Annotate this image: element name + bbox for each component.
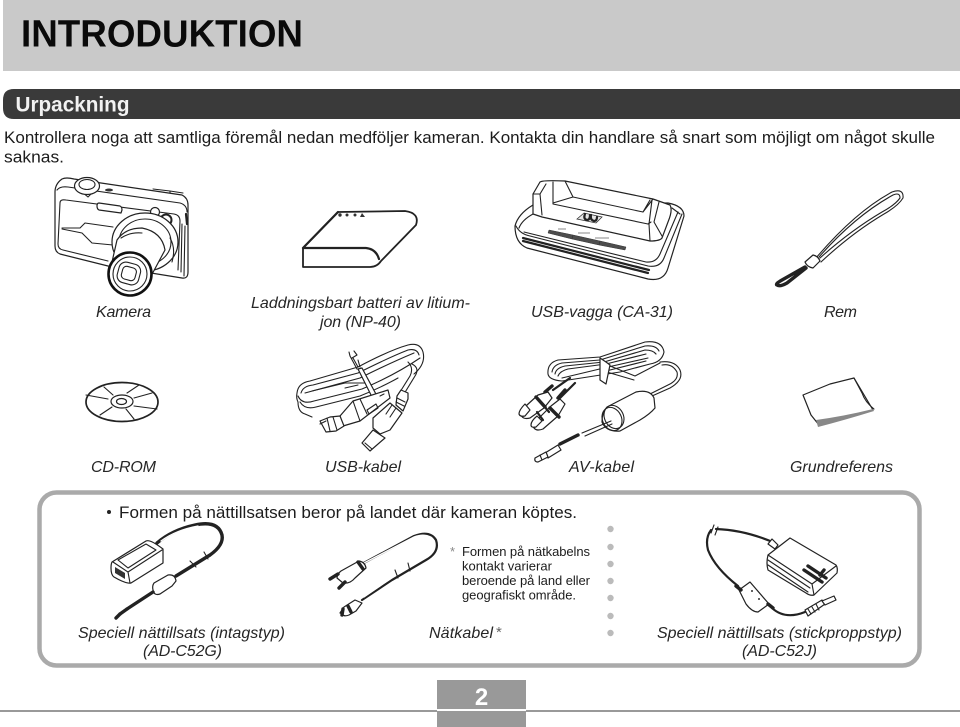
caption: camera: Kamera [96, 304, 151, 321]
caption: plug-type adapter: (AD-C52J) [742, 643, 817, 660]
caption: power cord: Nätkabel [429, 625, 493, 642]
intro text [4, 129, 935, 166]
icon: reference booklet [803, 378, 874, 427]
caption: intake-type adapter [78, 625, 285, 660]
icon: battery [303, 211, 417, 267]
footnote: kontakt varierar [462, 558, 553, 574]
icon: intake-type adapter [111, 524, 222, 618]
bullet note: Formen på nättillsatsen beror på landet där kameran köptes. [119, 503, 577, 522]
page number: 2 [475, 684, 488, 711]
section heading bar [3, 89, 960, 119]
footnote [450, 544, 591, 602]
header band [3, 0, 960, 71]
title: INTRODUKTION [21, 14, 303, 56]
caption: strap: Rem [824, 304, 857, 321]
intro text: Kontrollera noga att samtliga föremål nedan medföljer kameran. Kontakta din handlare så snart som möjligt om något skulle [4, 129, 935, 147]
icon: CD-ROM [86, 382, 158, 422]
icon: AV cable [519, 342, 681, 462]
caption: intake-type adapter: Speciell nättillsats (intagstyp) [78, 625, 285, 642]
footnote: Formen på nätkabelns [462, 544, 590, 559]
caption: CD-ROM: CD-ROM [91, 459, 157, 476]
caption: USB cradle: USB-vagga (CA-31) [531, 304, 673, 321]
caption: USB cable: USB-kabel [325, 459, 401, 476]
caption: power cord: * [496, 624, 502, 641]
footnote: geografiskt område. [462, 588, 576, 602]
caption: AV cable: AV-kabel [568, 459, 634, 476]
icon: power cord [330, 534, 437, 616]
page number tab [0, 680, 960, 727]
caption: battery [251, 295, 470, 331]
footnote: beroende på land eller [462, 573, 591, 588]
caption: plug-type adapter [657, 625, 902, 660]
panel: AC adapter options [40, 492, 920, 666]
dotted separator [607, 526, 614, 636]
icon: USB cradle [515, 181, 684, 280]
icon: plug-type adapter [707, 525, 837, 616]
icon: camera [55, 178, 188, 296]
footnote: * [450, 544, 455, 559]
icon: strap [777, 191, 903, 286]
caption: intake-type adapter: (AD-C52G) [143, 643, 222, 660]
icon: USB cable [297, 344, 424, 451]
section heading: Urpackning [16, 94, 130, 116]
caption: plug-type adapter: Speciell nättillsats (stickproppstyp) [657, 625, 902, 642]
caption: battery: Laddningsbart batteri av litium- [251, 295, 470, 312]
intro text: saknas. [4, 148, 64, 166]
caption: reference booklet: Grundreferens [790, 459, 893, 476]
caption: battery: jon (NP-40) [318, 314, 401, 331]
